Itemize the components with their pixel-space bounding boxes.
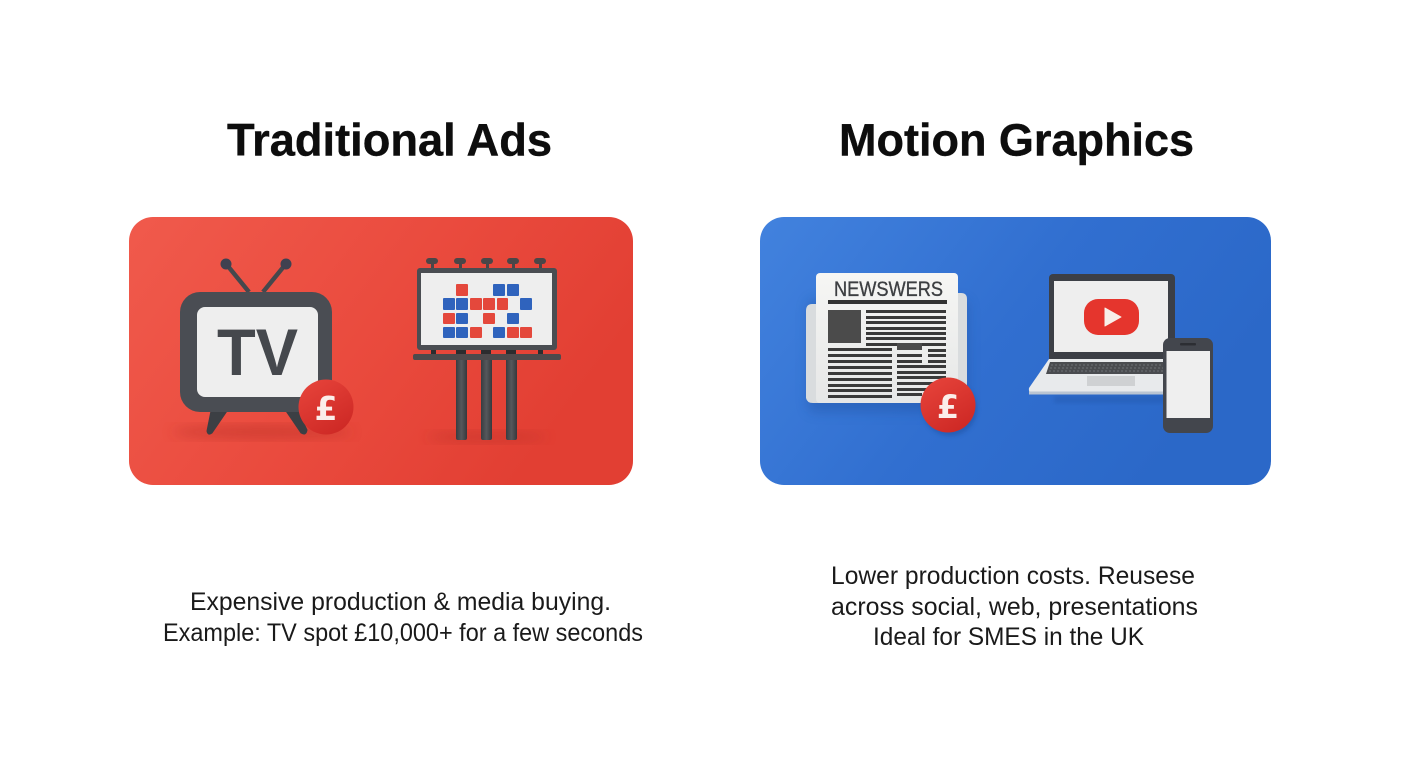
text block: traditional ads description: Example: TV spot £10,000+ for a few seconds: [163, 619, 643, 647]
text block: motion graphics description: Lower production costs. Reusese: [831, 562, 1195, 590]
panel: red illustration card: [129, 217, 633, 485]
icon: pound badge: [298, 380, 354, 434]
icon: laptop and phone: [1029, 274, 1213, 433]
icon: newspaper with pound badge: [806, 273, 977, 436]
text block: traditional ads description: [163, 588, 643, 647]
TV lettering: TV: [217, 315, 298, 389]
newspaper text lines: [828, 310, 946, 398]
heading: Motion Graphics: Motion Graphics: [839, 114, 1194, 166]
heading: Traditional Ads: Traditional Ads: [227, 114, 552, 166]
panel: motion graphics column: [760, 114, 1271, 651]
text block: traditional ads description: Expensive production & media buying.: [190, 588, 611, 616]
newspaper masthead: NEWSWERS: [834, 278, 943, 301]
play button: [1084, 299, 1139, 335]
billboard mosaic: [443, 284, 532, 338]
text block: motion graphics description: across social, web, presentations: [831, 593, 1198, 621]
icon: pound badge: £: [937, 388, 959, 426]
icon: pound badge: £: [315, 389, 337, 428]
icon: pound badge: [920, 378, 977, 436]
icon: billboard: [413, 258, 561, 442]
text block: motion graphics description: [831, 562, 1198, 651]
phone: [1163, 338, 1213, 433]
panel: traditional ads column: [129, 114, 643, 647]
panel: blue illustration card: [760, 217, 1271, 485]
laptop: [1029, 274, 1175, 394]
text block: motion graphics description: Ideal for SMES in the UK: [873, 623, 1144, 651]
newspaper image block: [828, 310, 861, 343]
icon: television with pound badge: [172, 258, 354, 438]
